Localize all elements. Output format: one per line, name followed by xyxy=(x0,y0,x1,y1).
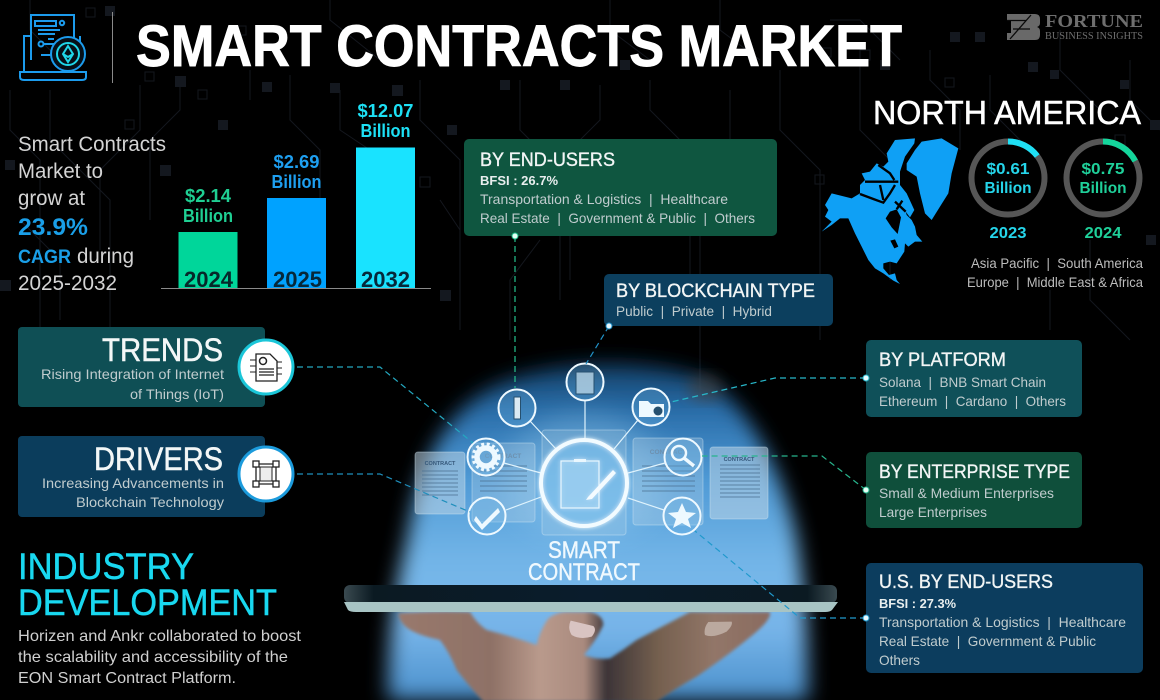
photo: person holding tablet with smart contract hologram: CONTRACT xyxy=(650,449,686,456)
title: SMART CONTRACTS MARKET xyxy=(136,14,902,79)
shirt xyxy=(388,364,808,700)
connector: U.S. by end-users xyxy=(695,531,866,618)
panel: by blockchain type: BY BLOCKCHAIN TYPE xyxy=(616,281,815,302)
logo: Fortune Business Insights: FORTUNE xyxy=(1045,11,1143,31)
hologram spokes xyxy=(504,400,665,510)
panel: trends: of Things (IoT) xyxy=(130,386,224,402)
panel: by enterprise type: Small & Medium Enterprises xyxy=(879,485,1054,501)
photo: person holding tablet with smart contract hologram xyxy=(344,364,838,700)
connector: trends xyxy=(297,367,473,443)
region heading: NORTH AMERICA xyxy=(873,94,1141,131)
text block: CAGR statement xyxy=(18,133,166,295)
connector: end-users xyxy=(514,236,516,388)
text block: CAGR statement: 23.9% xyxy=(18,214,88,241)
panel: by blockchain type: Public | Private | Hybrid xyxy=(616,303,772,319)
panel: trends xyxy=(18,327,293,407)
bar 2025: 2025 xyxy=(273,267,322,292)
panel: by end-users xyxy=(464,139,777,239)
panel: U.S. by end-users xyxy=(863,563,1143,673)
panel: U.S. by end-users: BFSI : 27.3% xyxy=(879,596,956,611)
logo: Fortune Business Insights xyxy=(1007,11,1143,42)
header divider xyxy=(112,12,114,83)
text block: CAGR statement: Market to xyxy=(18,160,103,183)
hologram icon circles xyxy=(468,364,702,534)
collar xyxy=(687,374,723,402)
panel: by end-users: BY END-USERS xyxy=(480,150,615,171)
text block: other regions xyxy=(967,255,1143,290)
connector: enterprise type xyxy=(702,456,866,490)
donut: 2023: 2023 xyxy=(990,225,1027,242)
text block: industry development: EON Smart Contract Platform. xyxy=(18,670,236,687)
panel: drivers: DRIVERS xyxy=(94,441,223,477)
hologram caption: SMART xyxy=(548,537,620,564)
bar 2025 xyxy=(267,152,326,292)
hologram caption xyxy=(528,537,640,586)
panel: by enterprise type: BY ENTERPRISE TYPE xyxy=(879,462,1070,483)
panel: trends: Rising Integration of Internet xyxy=(41,366,224,382)
icon: blockchain xyxy=(239,447,293,501)
panel: by blockchain type xyxy=(604,274,833,329)
panel: drivers xyxy=(18,436,293,517)
donut: 2023: Billion xyxy=(984,180,1032,197)
connector: drivers xyxy=(297,474,470,512)
panel: drivers: Blockchain Technology xyxy=(76,494,224,510)
bar 2025: Billion xyxy=(272,172,322,192)
hologram caption: CONTRACT xyxy=(528,559,640,586)
panel: by platform: Ethereum | Cardano | Others xyxy=(879,393,1066,409)
bar 2032: 2032 xyxy=(361,267,410,292)
hologram central ring with document and pen xyxy=(541,440,627,526)
contract sheets xyxy=(415,430,768,535)
logo: Fortune Business Insights: BUSINESS INSIGHTS xyxy=(1045,31,1143,42)
panel: by platform: BY PLATFORM xyxy=(879,350,1006,371)
text block: CAGR statement: grow at xyxy=(18,187,85,210)
bar 2032: Billion xyxy=(360,121,410,141)
photo: person holding tablet with smart contract hologram: CONTRACT xyxy=(724,457,755,463)
bar 2024: $2.14 xyxy=(185,186,231,206)
donut: 2023: $0.61 xyxy=(986,161,1030,178)
photo: person holding tablet with smart contract hologram: CONTRACT xyxy=(425,461,456,467)
panel: by enterprise type xyxy=(863,452,1082,528)
text block: industry development: Horizen and Ankr collaborated to boost xyxy=(18,628,302,645)
donut: 2023 xyxy=(972,141,1044,242)
heading: industry development: DEVELOPMENT xyxy=(18,582,277,623)
bar 2025: $2.69 xyxy=(274,152,320,172)
map: North America xyxy=(822,138,958,284)
panel: by platform: Solana | BNB Smart Chain xyxy=(879,374,1046,390)
panel: by end-users: Transportation & Logistics | Healthcare xyxy=(480,191,728,207)
connector: blockchain type xyxy=(586,326,609,364)
text block: CAGR statement: 2025-2032 xyxy=(18,272,117,295)
bar 2024: Billion xyxy=(183,206,233,226)
panel: by end-users: BFSI : 26.7% xyxy=(480,173,558,188)
text block: CAGR statement: during xyxy=(77,245,134,268)
panel: U.S. by end-users: Transportation & Logistics | Healthcare xyxy=(879,614,1126,630)
bar chart: market size xyxy=(161,101,431,292)
panel: drivers: Increasing Advancements in xyxy=(42,475,224,491)
panel: by enterprise type: Large Enterprises xyxy=(879,504,987,520)
connector: platform xyxy=(671,378,866,402)
text block: other regions: Europe | Middle East & Africa xyxy=(967,274,1143,290)
text block: industry development: the scalability and accessibility of the xyxy=(18,649,288,666)
heading: industry development xyxy=(18,546,277,623)
icon: smart contract logo xyxy=(20,15,86,80)
photo: person holding tablet with smart contract hologram: CONTRACT xyxy=(485,453,521,460)
panel: trends: TRENDS xyxy=(102,332,223,368)
donut: 2024: Billion xyxy=(1080,180,1126,197)
text block: industry development xyxy=(18,628,302,687)
donut: 2024: $0.75 xyxy=(1082,161,1125,178)
text block: CAGR statement: Smart Contracts xyxy=(18,133,166,156)
icon: IoT document xyxy=(239,340,293,394)
panel: U.S. by end-users: Others xyxy=(879,652,920,668)
heading: industry development: INDUSTRY xyxy=(18,546,194,587)
bar 2024 xyxy=(178,186,238,292)
tablet xyxy=(344,585,837,603)
donut: 2024: 2024 xyxy=(1084,225,1122,242)
bar 2032: $12.07 xyxy=(358,101,414,121)
text block: CAGR statement: CAGR xyxy=(18,247,71,268)
panel: by end-users: Real Estate | Government & Public | Others xyxy=(480,210,755,226)
hologram icon glyphs xyxy=(473,372,696,530)
panel: by platform xyxy=(863,340,1082,417)
hologram glow xyxy=(504,414,664,538)
donut: 2024 xyxy=(1066,142,1140,242)
bar 2032 xyxy=(356,101,415,292)
panel: U.S. by end-users: U.S. BY END-USERS xyxy=(879,572,1053,593)
text block: other regions: Asia Pacific | South America xyxy=(971,255,1143,271)
panel: U.S. by end-users: Real Estate | Government & Public xyxy=(879,633,1096,649)
hand xyxy=(398,612,770,700)
bar 2024: 2024 xyxy=(184,267,234,292)
